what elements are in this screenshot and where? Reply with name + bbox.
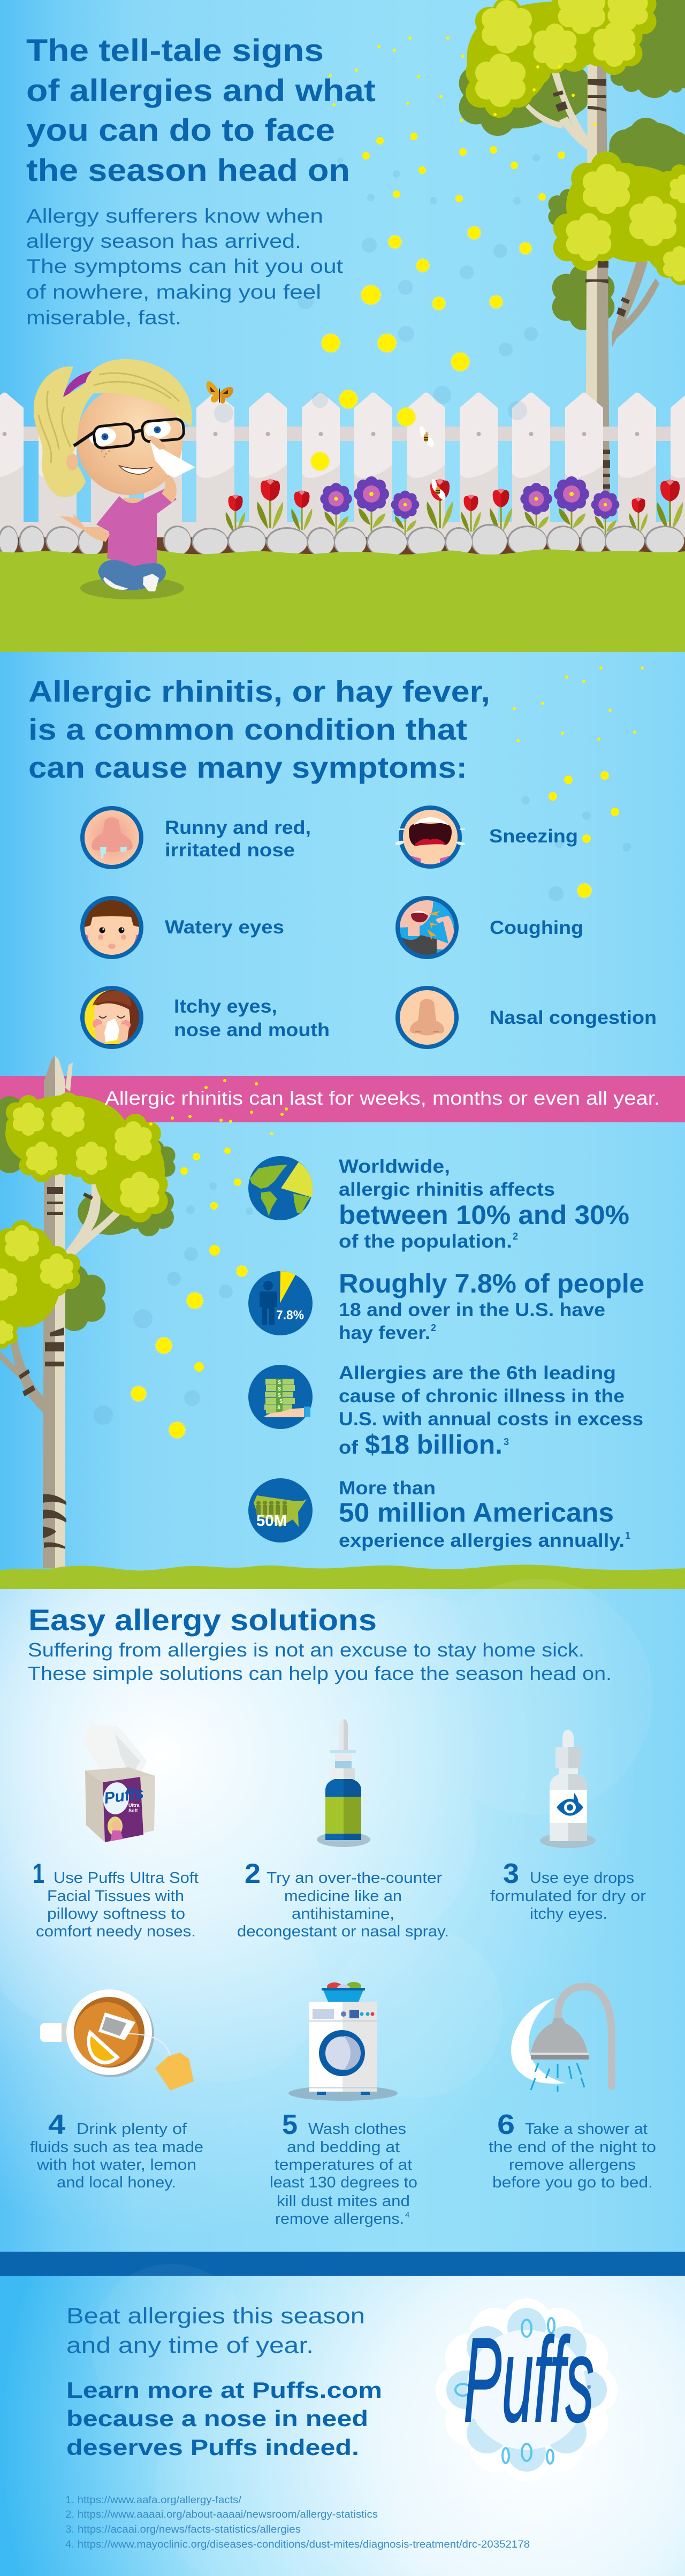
stat: 7.8 percent: hay fever. (339, 1323, 430, 1343)
stat: 7.8 percent: 2 (431, 1323, 436, 1333)
step 6 text: Take a shower at (525, 2121, 648, 2138)
references (65, 2495, 530, 2550)
hero title: the season head on (26, 153, 350, 188)
icon: puffs tissue box: Soft (128, 1808, 138, 1813)
step 5 text: 4 (405, 2210, 409, 2220)
step 4 text: 4 (48, 2109, 65, 2140)
stat: 50 million (339, 1478, 630, 1551)
stat: chronic illness: Allergies are the 6th leading (339, 1363, 616, 1384)
step 5 text: least 130 degrees to (270, 2174, 417, 2191)
step 3 text: formulated for dry or (490, 1888, 646, 1905)
step 5 text: and bedding at (287, 2139, 400, 2156)
fence pollen (311, 390, 415, 470)
stat: chronic illness: $18 billion. (365, 1430, 503, 1460)
icon: cup of tea (40, 1989, 194, 2091)
stat: 50 million: 50 million Americans (339, 1498, 614, 1528)
stat: chronic illness: of (339, 1437, 358, 1458)
stat: 50 million: More than (339, 1478, 436, 1499)
label: sneezing: Sneezing (489, 826, 578, 847)
girl with tissue (34, 359, 195, 599)
label: itchy eyes: nose and mouth (174, 1020, 330, 1040)
icon: nasal congestion (398, 988, 456, 1047)
label: itchy eyes: Itchy eyes, (174, 996, 277, 1017)
hero intro text: of nowhere, making you feel (26, 281, 321, 303)
solutions intro: Suffering from allergies is not an excuse to stay home sick. (28, 1639, 584, 1661)
closing message: deserves Puffs indeed. (66, 2435, 359, 2460)
section heading: allergic rhinitis: Allergic rhinitis, or hay fever, (28, 674, 490, 708)
step 5 text: remove allergens. (275, 2210, 404, 2228)
step 2 text (237, 1858, 449, 1940)
icon: watery eyes (82, 898, 141, 958)
closing section background (0, 2264, 685, 2576)
section heading: allergic rhinitis: is a common condition that (28, 712, 467, 746)
icon: itchy eyes (82, 988, 141, 1048)
step 5 text: Wash clothes (308, 2121, 406, 2138)
puffs logo: ® (587, 2384, 591, 2390)
icon: person pie (248, 1271, 313, 1335)
step 4 text (30, 2109, 203, 2191)
references: 3. https://acaai.org/news/facts-statistics/allergies (65, 2524, 301, 2535)
hero intro text: miserable, fast. (26, 307, 181, 329)
symptoms pollen (513, 666, 644, 901)
hero title: of allergies and what (26, 73, 376, 108)
icon: money in hand: $ (278, 1380, 281, 1386)
stat: worldwide: of the population. (339, 1231, 512, 1252)
stat: chronic illness: U.S. with annual costs in excess (339, 1409, 643, 1430)
step 5 text: 5 (282, 2109, 298, 2140)
step 2 text: medicine like an (284, 1888, 402, 1905)
closing message: because a nose in need (66, 2406, 368, 2431)
step 1 text: Use Puffs Ultra Soft (54, 1870, 199, 1887)
step 3 text: 3 (503, 1858, 519, 1889)
icon: globe (248, 1156, 313, 1220)
icon: puffs tissue box (83, 1724, 155, 1842)
pink banner (0, 1076, 685, 1122)
bees (418, 425, 447, 501)
icon: USA map (248, 1478, 313, 1542)
step 6 text (489, 2109, 656, 2191)
icon: money in hand: $ (277, 1405, 280, 1411)
step 5 text: temperatures of at (275, 2156, 412, 2174)
banner text: Allergic rhinitis can last for weeks, months or even all year. (105, 1087, 660, 1109)
grass strip (0, 1565, 685, 1590)
stat: worldwide: 2 (513, 1231, 518, 1242)
step 6 text: remove allergens (509, 2156, 636, 2174)
stat: worldwide: between 10% and 30% (339, 1200, 629, 1230)
references: 2. https://www.aaaai.org/about-aaaai/newsroom/allergy-statistics (65, 2509, 378, 2520)
hero intro text: allergy season has arrived. (26, 230, 301, 252)
label: itchy eyes (174, 996, 330, 1040)
icon: nasal spray (317, 1719, 370, 1847)
references: 1. https://www.aafa.org/allergy-facts/ (65, 2495, 242, 2506)
icon: runny nose (82, 808, 141, 867)
step 6 text: 6 (497, 2109, 515, 2140)
hero intro text: The symptoms can hit you out (26, 255, 344, 277)
solutions intro (28, 1639, 612, 1684)
stat: 50 million: experience allergies annually. (339, 1530, 625, 1551)
step 6 text: before you go to bed. (492, 2174, 653, 2191)
step 2 text: antihistamine, (292, 1905, 394, 1922)
icon: puffs tissue box: Puffs (103, 1784, 145, 1807)
hero title: The tell-tale signs (26, 33, 324, 68)
stat: chronic illness: 3 (504, 1437, 509, 1447)
icon: USA map: 50M (256, 1512, 287, 1530)
step 3 text (490, 1858, 646, 1922)
hero title (26, 33, 376, 188)
step 2 text: 2 (245, 1858, 261, 1889)
references: 4. https://www.mayoclinic.org/diseases-conditions/dust-mites/diagnosis-treatment/drc-20352178 (65, 2539, 530, 2550)
closing message: Learn more at Puffs.com (66, 2377, 382, 2403)
picket fence (0, 386, 685, 543)
hero pollen (298, 36, 596, 371)
hero intro text (26, 205, 344, 329)
icon: shower and moon (511, 1987, 612, 2092)
stat: 7.8 percent: Roughly 7.8% of people (339, 1268, 644, 1298)
icon: money in hand: $ (278, 1386, 281, 1392)
label: runny nose: Runny and red, (165, 817, 311, 838)
label: coughing: Coughing (490, 917, 583, 938)
solutions heading: Easy allergy solutions (28, 1603, 377, 1637)
icon: money in hand (248, 1365, 313, 1429)
icon: money in hand: $ (278, 1393, 281, 1399)
stat: chronic illness: cause of chronic illness in the (339, 1386, 625, 1407)
step 4 text: Drink plenty of (77, 2121, 187, 2138)
step 4 text: fluids such as tea made (30, 2139, 203, 2156)
solutions intro: These simple solutions can help you face the season head on. (28, 1662, 612, 1684)
stat: 7.8 percent (339, 1268, 644, 1343)
puffs logo (436, 2298, 618, 2481)
tulips and purple flowers (226, 476, 683, 535)
section heading: allergic rhinitis: can cause many symptoms: (28, 750, 467, 784)
step 1 text: comfort needy noses. (36, 1923, 196, 1940)
label: nasal congestion: Nasal congestion (490, 1007, 657, 1028)
stat: worldwide (339, 1156, 629, 1252)
closing message (66, 2303, 382, 2460)
step 1 text (33, 1858, 199, 1940)
step 2 text: decongestant or nasal spray. (237, 1923, 449, 1940)
stat: 7.8 percent: 18 and over in the U.S. have (339, 1300, 605, 1320)
blue divider band (0, 2252, 685, 2276)
icon: person pie: 7.8% (276, 1308, 304, 1323)
soil and rock border (0, 524, 685, 558)
hero title: you can do to face (26, 113, 335, 148)
grass (0, 549, 685, 652)
label: runny nose (165, 817, 311, 861)
step 1 text: 1 (33, 1858, 44, 1889)
stat: worldwide: Worldwide, (339, 1156, 450, 1177)
solutions section background (0, 1579, 685, 2252)
sky background for upper sections (0, 0, 685, 1589)
icon: washing machine (288, 1982, 398, 2101)
closing message: Beat allergies this season (66, 2303, 365, 2328)
stats pollen (94, 1079, 288, 1438)
stats tree (0, 1056, 176, 1568)
icon: sneezing (395, 808, 465, 867)
hero tree (459, 0, 685, 495)
butterfly (207, 381, 233, 404)
section heading: allergic rhinitis (28, 674, 490, 784)
icon: eye drops (540, 1730, 596, 1848)
step 3 text: itchy eyes. (530, 1905, 607, 1922)
step 1 text: pillowy softness to (47, 1905, 185, 1922)
step 5 text (270, 2109, 417, 2228)
step 4 text: with hot water, lemon (36, 2156, 196, 2174)
step 6 text: the end of the night to (489, 2139, 656, 2156)
step 5 text: kill dust mites and (277, 2193, 410, 2210)
hero intro text: Allergy sufferers know when (26, 205, 323, 227)
icon: puffs tissue box: Ultra (128, 1803, 140, 1808)
step 4 text: and local honey. (57, 2174, 176, 2191)
stat: chronic illness (339, 1363, 643, 1460)
step 1 text: Facial Tissues with (47, 1888, 184, 1905)
label: runny nose: irritated nose (165, 840, 295, 861)
closing message: and any time of year. (66, 2332, 314, 2358)
step 3 text: Use eye drops (530, 1870, 634, 1887)
stat: 50 million: 1 (625, 1530, 630, 1541)
icon: coughing (398, 898, 456, 957)
stat: worldwide: allergic rhinitis affects (339, 1179, 555, 1200)
label: watery eyes: Watery eyes (165, 917, 284, 938)
step 2 text: Try an over-the-counter (267, 1870, 442, 1887)
icon: money in hand: $ (279, 1399, 283, 1404)
